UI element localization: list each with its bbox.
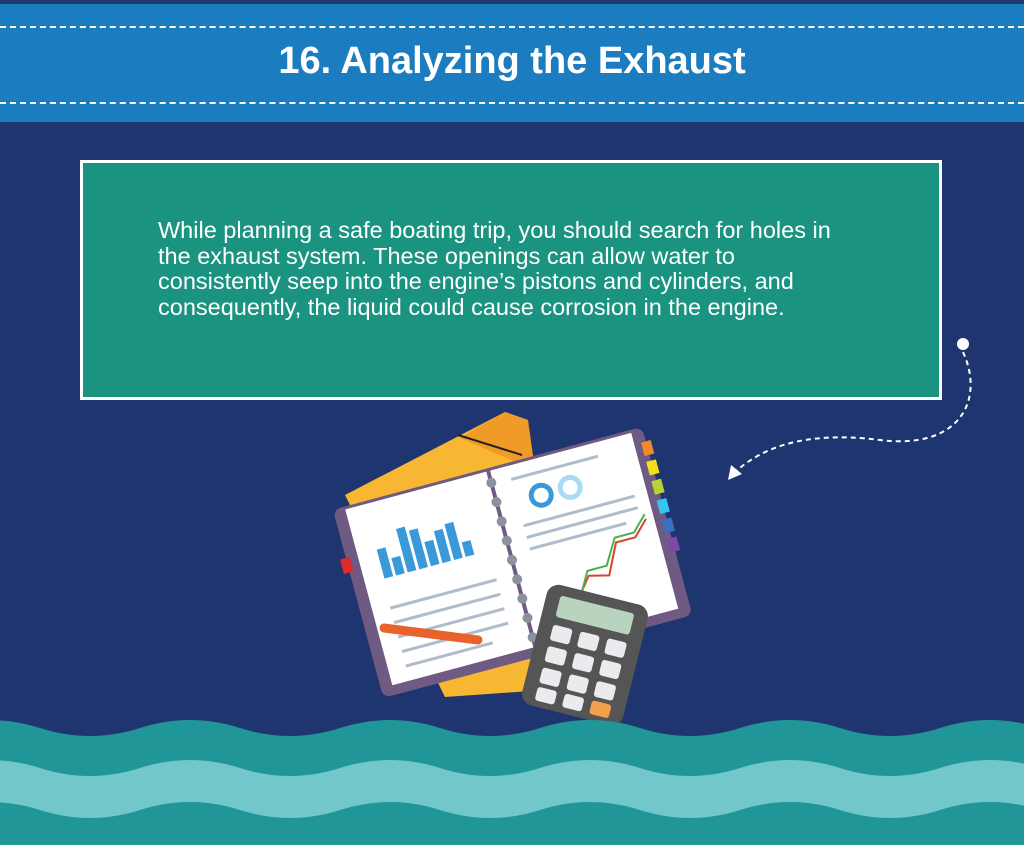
folder <box>345 412 545 697</box>
calculator <box>520 582 650 728</box>
waves <box>0 720 1024 845</box>
text block: While planning a safe boating trip, you should search for holes in the exhaust system. These openings can allow water to consistently seep into the engine’s pistons and cylinders, and consequently, the liquid could cause corrosion in the engine. <box>158 217 831 320</box>
pages <box>345 472 533 685</box>
header band <box>0 4 1024 122</box>
pen <box>384 628 478 640</box>
panel: text box <box>80 160 942 400</box>
cover <box>333 427 692 698</box>
title: 16. Analyzing the Exhaust <box>278 40 746 82</box>
